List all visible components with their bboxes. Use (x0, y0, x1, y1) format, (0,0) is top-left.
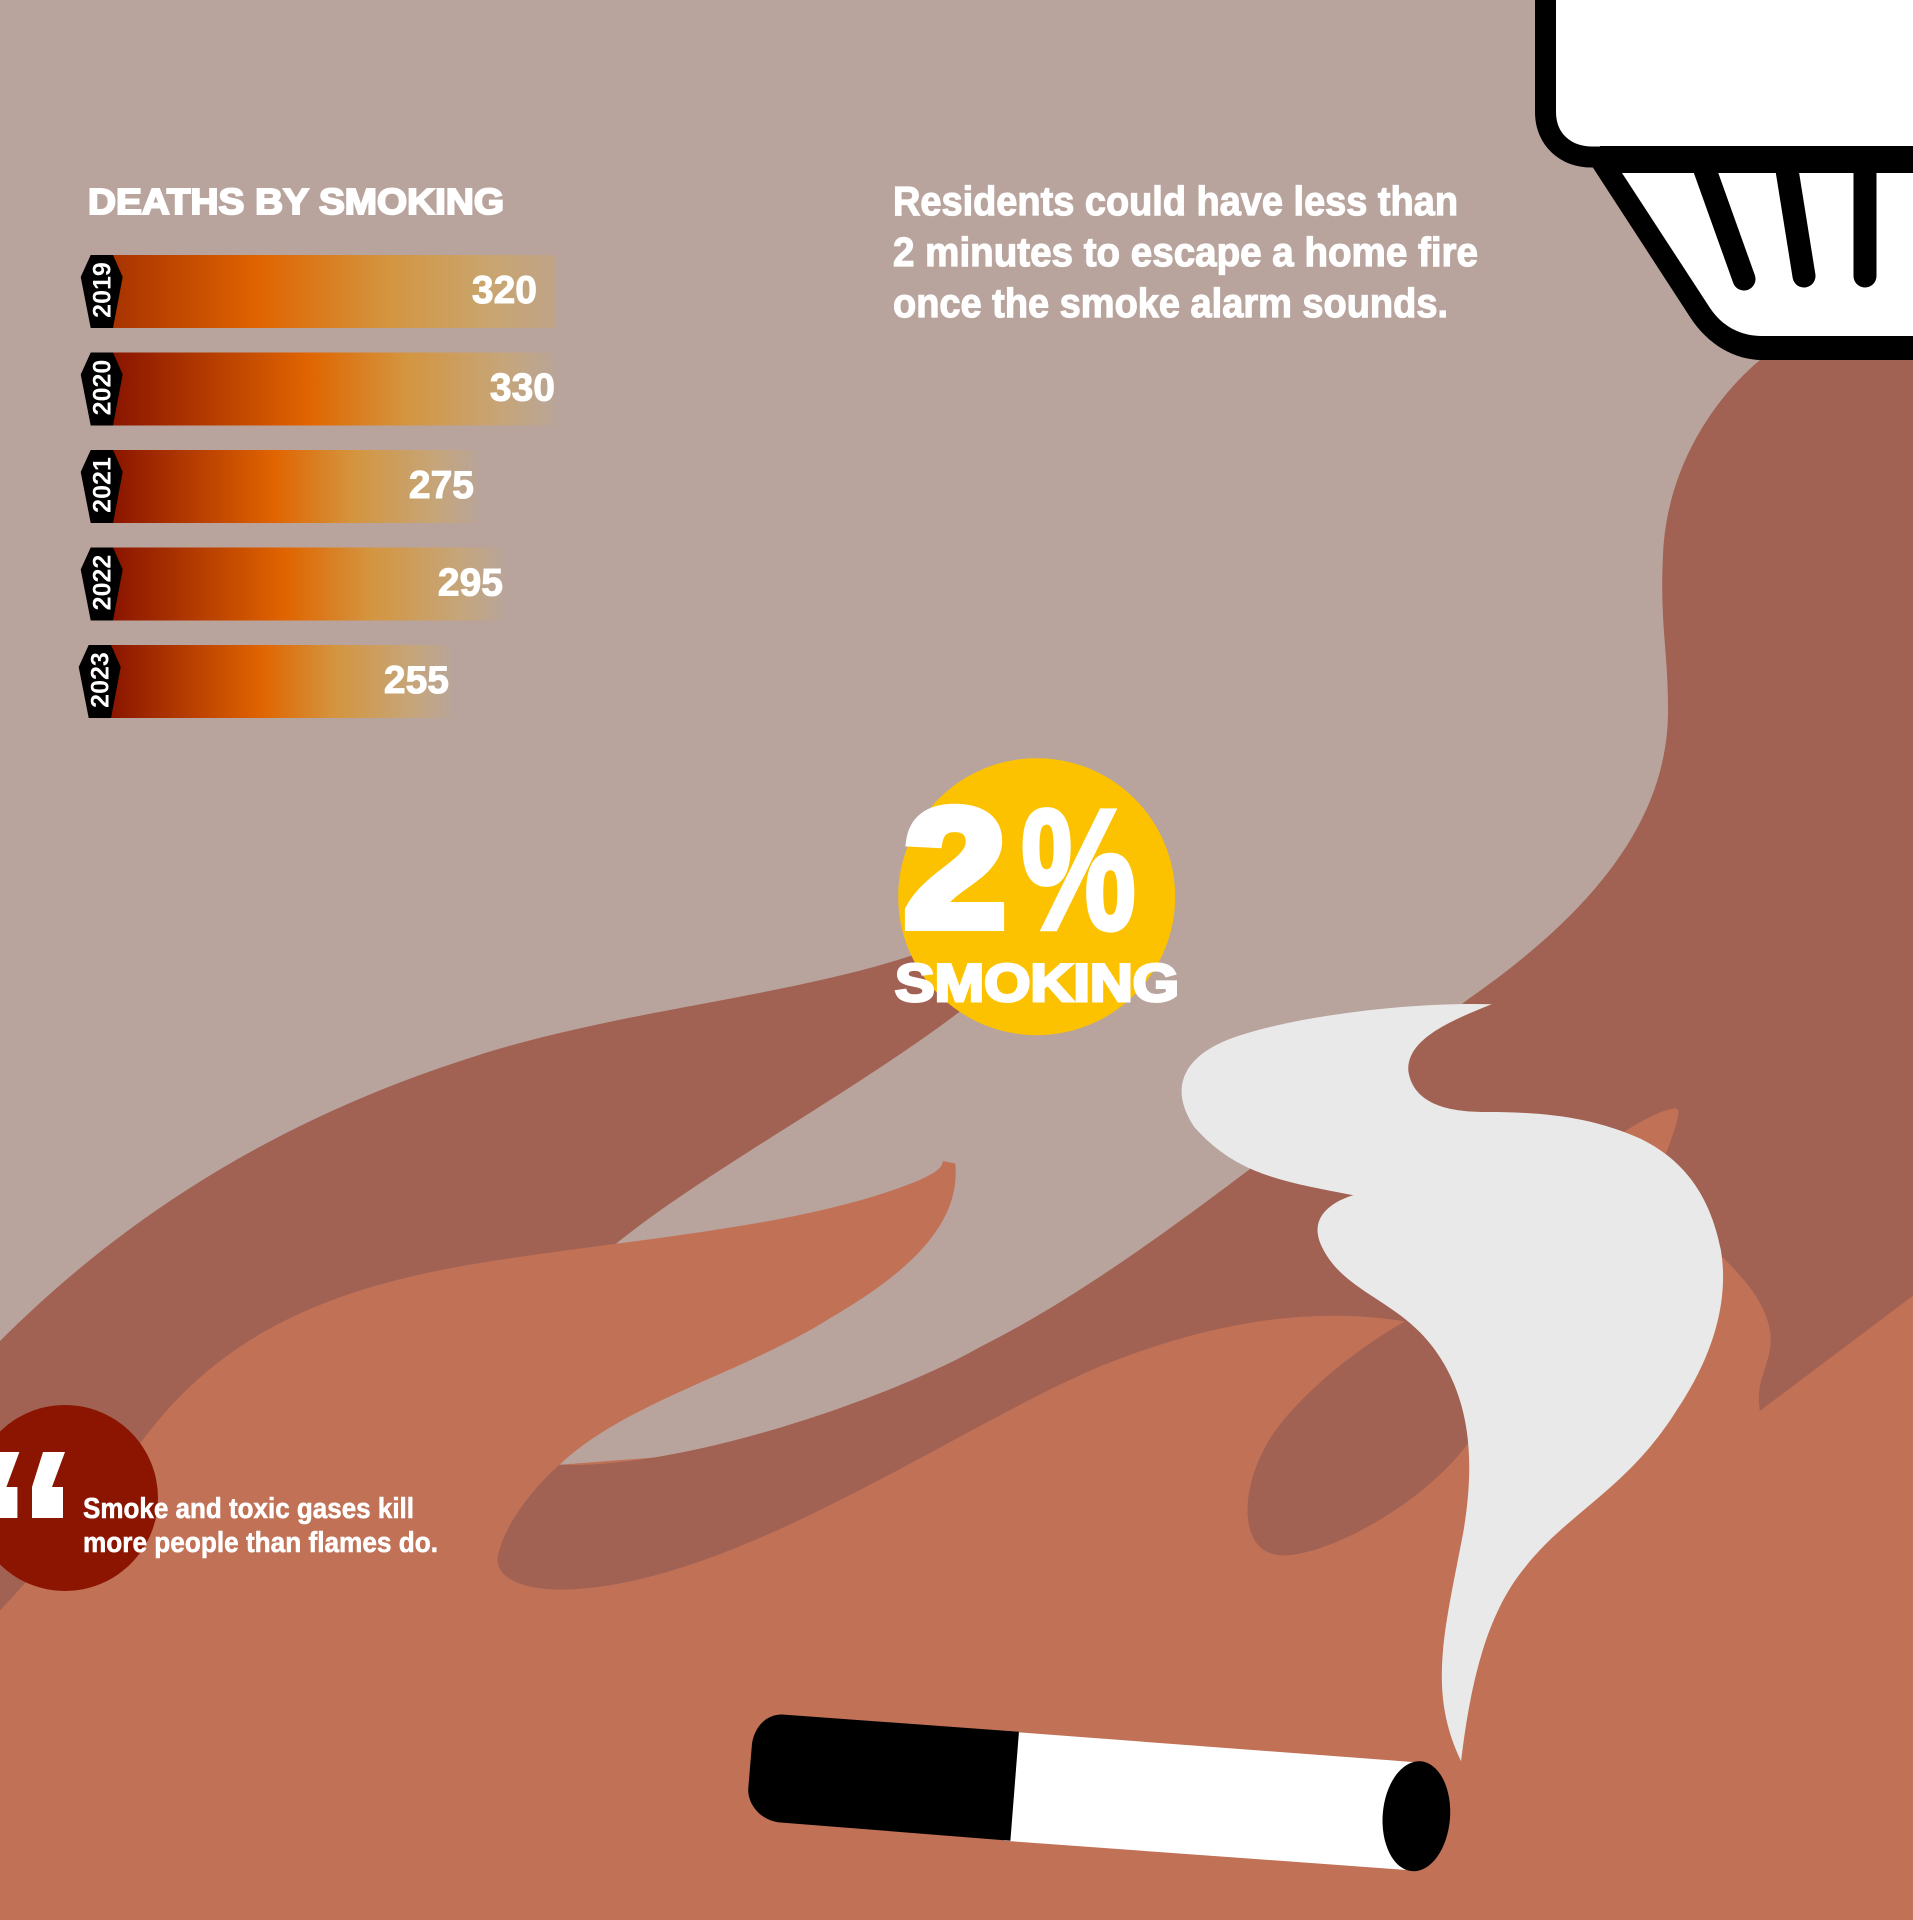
bar 2021: 275 (409, 464, 474, 507)
bar chart: deaths by smoking (79, 255, 555, 718)
bar 2023: 255 (384, 659, 449, 702)
bar 2023 (79, 645, 451, 718)
bar 2020 (81, 352, 555, 426)
icon: quotation mark (0, 1452, 65, 1518)
text block: escape time (893, 178, 1478, 326)
bar 2023: 2023 (87, 652, 115, 708)
dark smoke plume (498, 360, 1913, 1590)
callout: smoke and toxic gases: more people than flames do. (83, 1527, 438, 1559)
bar 2022 (81, 548, 503, 620)
left smoke lobe (0, 955, 961, 1610)
text block: escape time: 2 minutes to escape a home fire (893, 229, 1478, 275)
callout: smoke and toxic gases (0, 1405, 438, 1591)
icon: cigarette (748, 1715, 1454, 1874)
orange flame tip (1617, 1108, 1679, 1161)
bar 2022: 295 (438, 562, 503, 604)
white smoke (1182, 1004, 1723, 1761)
icon: smoke alarm (1546, 0, 1913, 360)
bar 2020: 330 (490, 366, 555, 410)
bar 2019: 2019 (89, 262, 117, 318)
bar 2021 (81, 450, 478, 523)
text block: escape time: Residents could have less than (893, 178, 1458, 224)
callout: 2% smoking (895, 758, 1179, 1035)
bar 2021: 2021 (89, 457, 117, 513)
bar 2019 (81, 255, 555, 328)
bar 2022: 2022 (89, 555, 117, 610)
orange flame (0, 1161, 1913, 1920)
callout: 2% smoking: 2 (904, 774, 1006, 962)
heading: DEATHS BY SMOKING (88, 181, 504, 222)
callout: 2% smoking: % (1021, 774, 1136, 966)
bar 2019: 320 (472, 269, 537, 312)
callout: 2% smoking: SMOKING (895, 954, 1179, 1013)
text block: escape time: once the smoke alarm sounds. (893, 280, 1448, 326)
bar 2020: 2020 (89, 360, 117, 415)
callout: smoke and toxic gases: Smoke and toxic gases kill (83, 1493, 414, 1525)
